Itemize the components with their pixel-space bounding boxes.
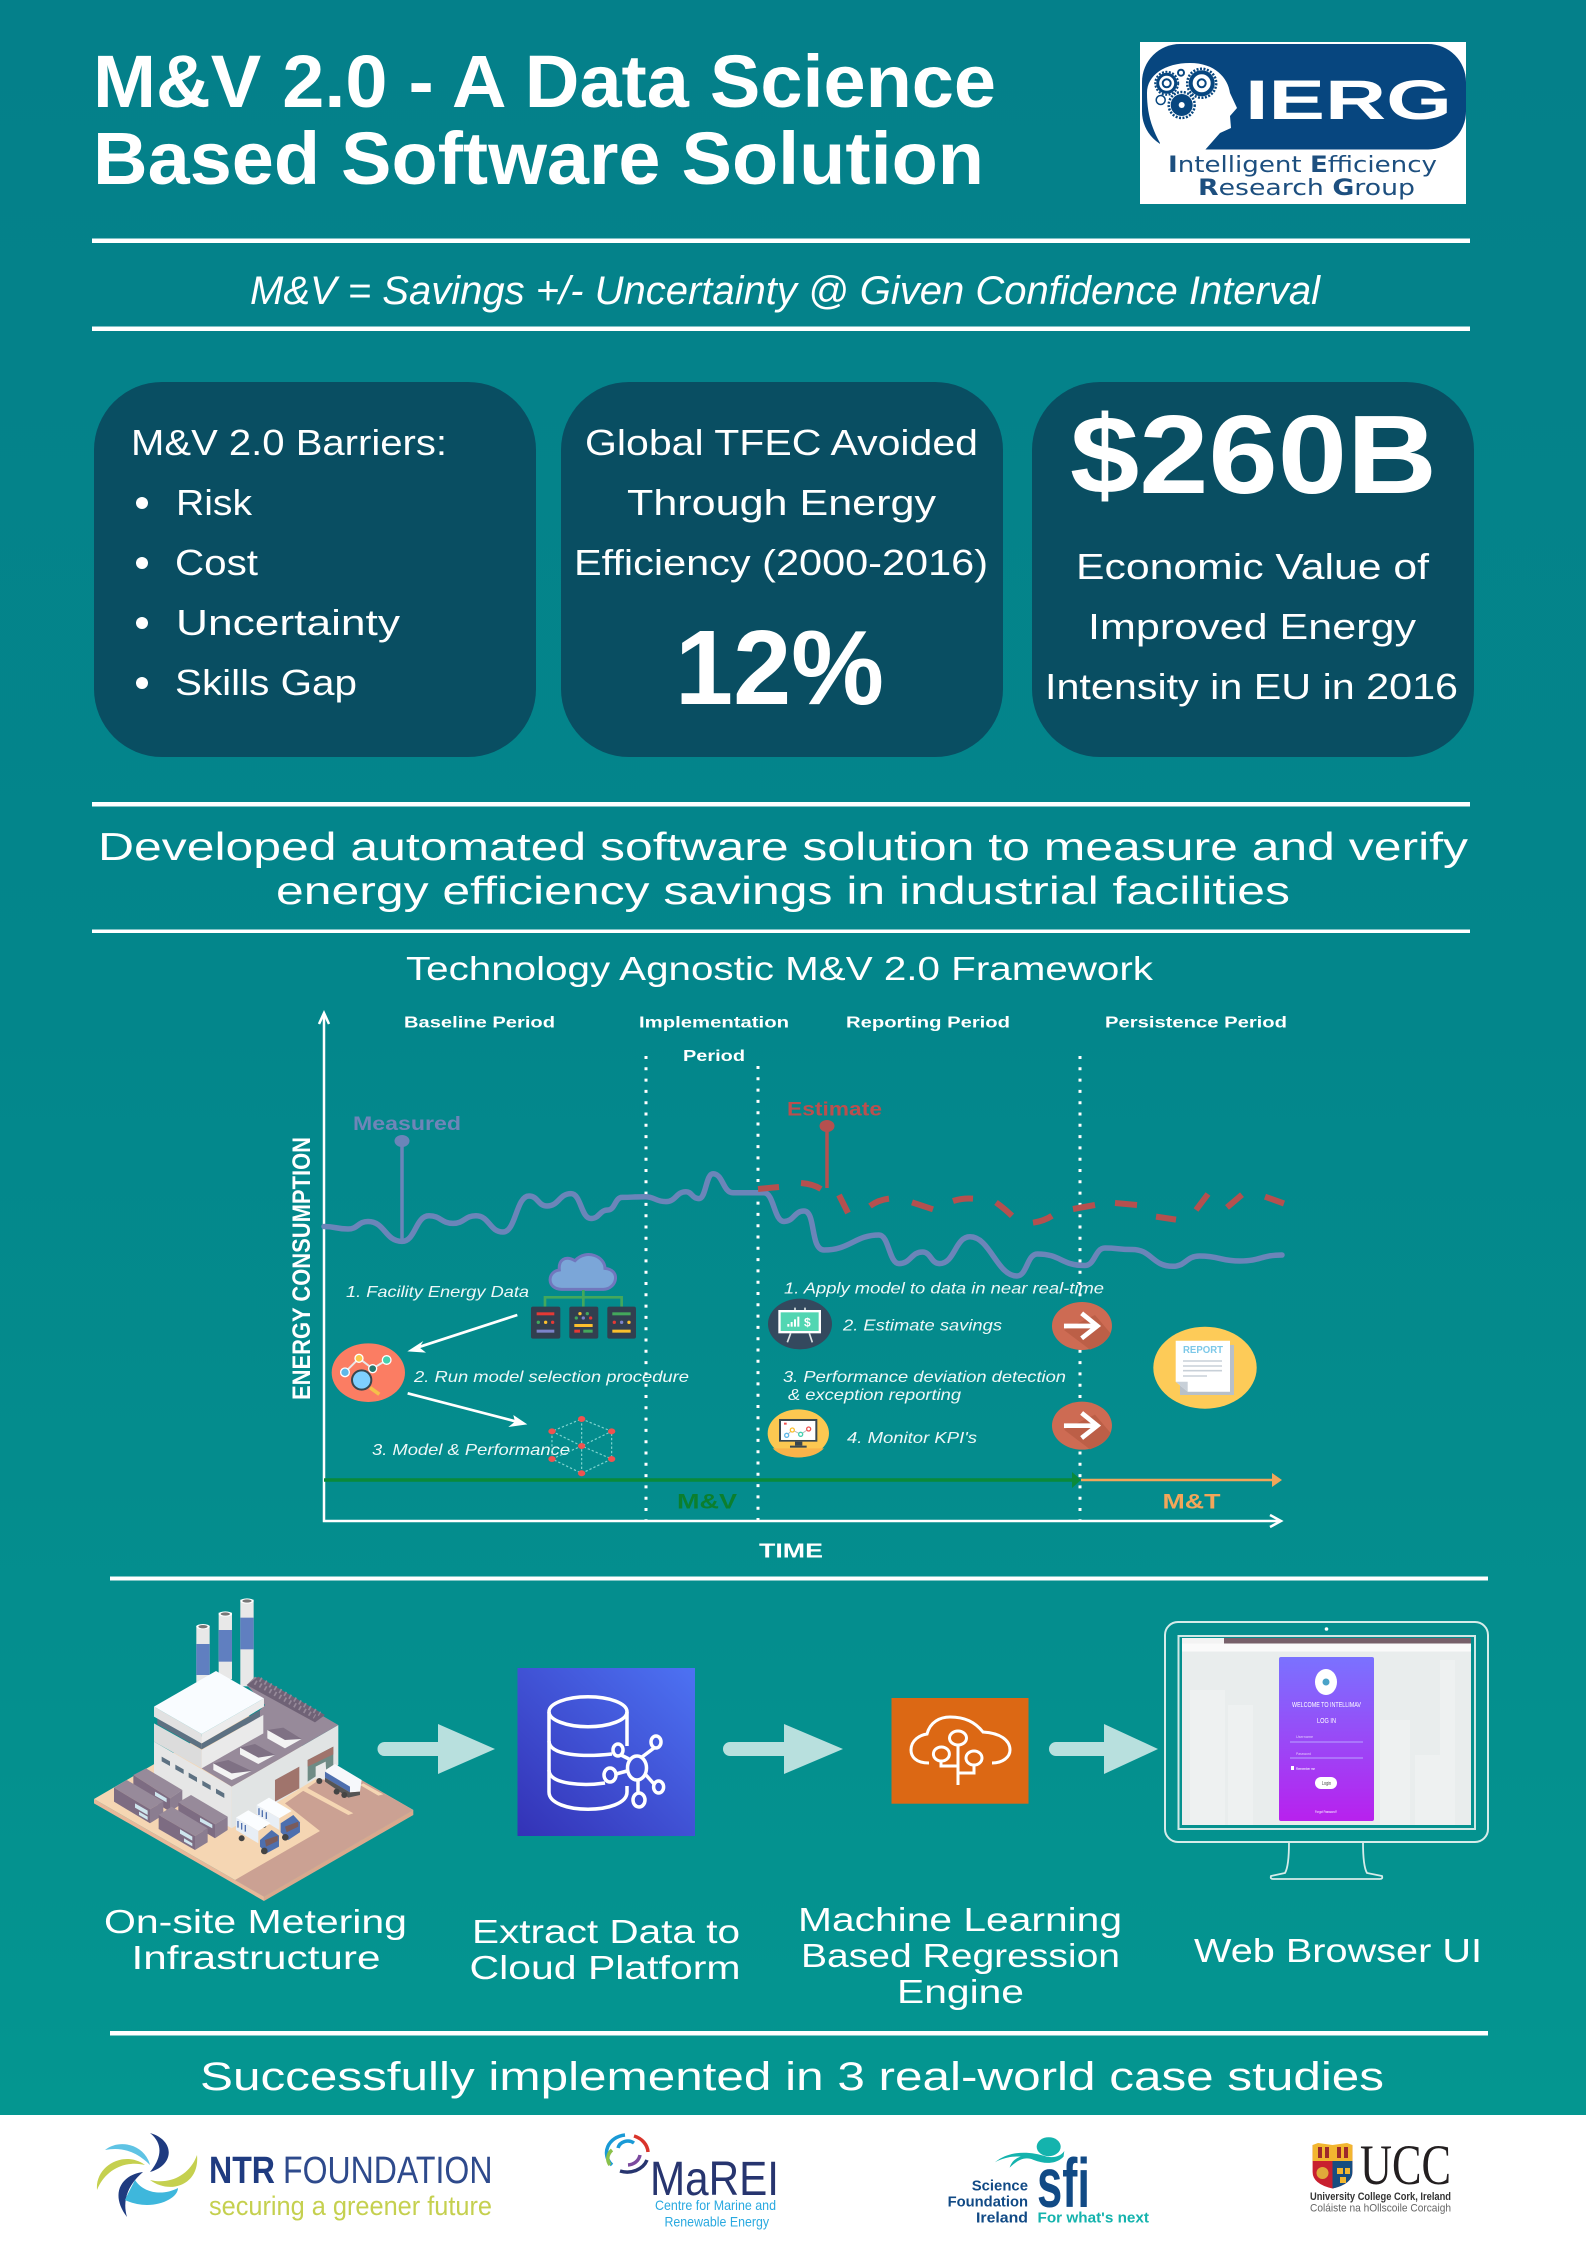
period labels: Implementation	[639, 1014, 789, 1032]
label: machine learning: Based Regression	[801, 1937, 1120, 1974]
logo: UCC: University College Cork, Ireland	[1310, 2191, 1451, 2203]
logo: Science Foundation Ireland: Foundation	[948, 2194, 1028, 2211]
step labels: 3. Model & Performance	[372, 1442, 570, 1459]
estimate label: Estimate	[787, 1100, 882, 1120]
icon: monitor with login screen: Password	[1296, 1751, 1311, 1756]
icon: arrow circle 2	[1052, 1402, 1112, 1450]
panel: global TFEC avoided	[561, 382, 1003, 757]
panel: economic value: Improved Energy	[1088, 606, 1416, 647]
footer: partner logos	[0, 2115, 1586, 2242]
logo: Science Foundation Ireland: For what's next	[1038, 2210, 1149, 2227]
logo: NTR Foundation: securing a greener future	[209, 2191, 492, 2221]
icon: report	[1153, 1327, 1257, 1409]
icon: monitor with login screen	[1165, 1622, 1488, 1879]
label: on-site metering: Infrastructure	[132, 1939, 380, 1976]
icon: monitor with login screen: LOG IN	[1317, 1718, 1336, 1725]
statement text: Developed automated software solution to measure and verify	[98, 826, 1469, 869]
logo: Science Foundation Ireland: Science	[972, 2178, 1028, 2195]
panel: economic value: Intensity in EU in 2016	[1045, 666, 1458, 707]
step labels	[346, 1280, 1104, 1459]
title: Based Software Solution	[93, 117, 984, 200]
logo: MaREI: Centre for Marine and	[655, 2197, 776, 2213]
step labels: 4. Monitor KPI's	[847, 1430, 977, 1447]
icon: arrow circle 1	[1052, 1302, 1112, 1350]
logo: MaREI: Renewable Energy	[664, 2214, 769, 2230]
y axis label: ENERGY CONSUMPTION	[288, 1137, 316, 1400]
panel: barriers: Cost	[175, 542, 258, 583]
icon: monitor KPIs	[768, 1409, 829, 1457]
panel: global TFEC avoided: Global TFEC Avoided	[585, 422, 978, 463]
icon: estimate savings board: $	[804, 1315, 811, 1329]
statement text: energy efficiency savings in industrial facilities	[276, 870, 1290, 913]
icon: monitor with login screen: WELCOME TO INTELLIMAV	[1292, 1702, 1361, 1709]
logo: IERG	[1140, 42, 1466, 204]
logo: NTR Foundation: NTR	[209, 2150, 275, 2192]
logo: Science Foundation Ireland: sfi	[1037, 2144, 1090, 2222]
axes	[319, 1013, 1281, 1527]
case studies statement: Successfully implemented in 3 real-world case studies	[200, 2055, 1384, 2099]
panel: global TFEC avoided: Efficiency (2000-2016)	[574, 542, 988, 583]
icon: monitor with login screen: Login	[1322, 1781, 1331, 1787]
logo: MaREI: MaREI	[650, 2153, 779, 2206]
logo: UCC	[1310, 2134, 1451, 2215]
label: on-site metering: On-site Metering	[104, 1903, 407, 1940]
step labels: 3. Performance deviation detection	[783, 1369, 1066, 1386]
arrow: cloud to engine	[723, 1724, 843, 1774]
panel: barriers: Uncertainty	[176, 602, 400, 643]
measured energy line	[324, 1174, 1282, 1276]
logo: UCC: UCC	[1360, 2134, 1451, 2197]
arrow: factory to cloud	[378, 1724, 495, 1774]
logo: Science Foundation Ireland: Ireland	[976, 2210, 1028, 2227]
step labels: 1. Apply model to data in near real-time	[784, 1280, 1104, 1298]
step labels: 2. Estimate savings	[842, 1318, 1002, 1335]
label: extract data: Cloud Platform	[470, 1949, 740, 1986]
M&T bar	[1081, 1473, 1282, 1514]
logo: NTR Foundation	[97, 2133, 492, 2221]
chart: M&V framework	[288, 1013, 1287, 1562]
period labels: Reporting Period	[846, 1014, 1010, 1032]
step labels: 1. Facility Energy Data	[346, 1284, 529, 1301]
panel: barriers: Skills Gap	[175, 662, 357, 703]
arrow: model selection to model	[408, 1393, 527, 1427]
title: M&V 2.0 - A Data Science	[93, 40, 996, 123]
icon: monitor with login screen: Forgot Password?	[1315, 1809, 1338, 1814]
arrow: engine to browser	[1049, 1724, 1158, 1774]
M&T bar: M&T	[1162, 1490, 1221, 1514]
logo: IERG: IERG	[1245, 68, 1452, 131]
measured label	[353, 1114, 461, 1240]
logo: IERG: Intelligent Efficiency	[1168, 153, 1437, 178]
icon: monitor with login screen: Remember me	[1296, 1766, 1316, 1771]
arrow: data to model selection	[407, 1315, 517, 1353]
period labels	[404, 1014, 1287, 1065]
panel: barriers: M&V 2.0 Barriers:	[131, 422, 447, 463]
icon: cloud and servers	[531, 1255, 636, 1339]
icon: machine learning engine	[892, 1698, 1028, 1804]
icon: report: REPORT	[1183, 1344, 1224, 1356]
step labels: 2. Run model selection procedure	[413, 1369, 689, 1386]
panel: global TFEC avoided: 12%	[675, 609, 884, 727]
panel: economic value: Economic Value of	[1076, 546, 1430, 587]
icon: data platform	[518, 1668, 695, 1836]
equation subtitle: M&V = Savings +/- Uncertainty @ Given Confidence Interval	[250, 269, 1321, 313]
M&V bar	[324, 1472, 1081, 1514]
title	[93, 40, 996, 200]
logo: NTR Foundation: FOUNDATION	[283, 2150, 492, 2192]
panel: barriers	[94, 382, 536, 757]
label: web browser UI: Web Browser UI	[1194, 1932, 1482, 1969]
icon: model selection magnifier	[332, 1343, 405, 1402]
logo: MaREI	[607, 2135, 779, 2230]
label: machine learning: Machine Learning	[798, 1901, 1122, 1938]
statement text	[98, 826, 1469, 913]
estimate label	[787, 1100, 882, 1188]
panel: economic value: $260B	[1070, 393, 1437, 517]
period labels: Period	[683, 1048, 745, 1065]
x axis label: TIME	[759, 1540, 823, 1562]
label: on-site metering	[104, 1903, 407, 1976]
logo: UCC: Coláiste na hOllscoile Corcaigh	[1310, 2203, 1451, 2215]
panel: economic value	[1032, 382, 1474, 757]
measured label: Measured	[353, 1114, 461, 1135]
icon: estimate savings board	[768, 1299, 832, 1349]
logo: IERG: Research Group	[1198, 176, 1415, 201]
label: machine learning: Engine	[897, 1973, 1024, 2010]
step labels: & exception reporting	[788, 1387, 961, 1404]
icon: factory	[94, 1598, 413, 1901]
estimated baseline dashed line	[758, 1183, 1284, 1223]
icon: model network cube	[548, 1416, 615, 1476]
panel: barriers: Risk	[176, 482, 253, 523]
logo: Science Foundation Ireland	[948, 2137, 1149, 2227]
period labels: Persistence Period	[1105, 1014, 1287, 1032]
framework heading: Technology Agnostic M&V 2.0 Framework	[406, 950, 1154, 987]
icon: monitor with login screen: Username	[1296, 1734, 1314, 1739]
M&V bar: M&V	[677, 1490, 737, 1514]
label: extract data	[470, 1913, 740, 1986]
period labels: Baseline Period	[404, 1014, 555, 1032]
label: machine learning	[798, 1901, 1122, 2010]
panel: global TFEC avoided: Through Energy	[627, 482, 936, 523]
label: extract data: Extract Data to	[472, 1913, 740, 1950]
